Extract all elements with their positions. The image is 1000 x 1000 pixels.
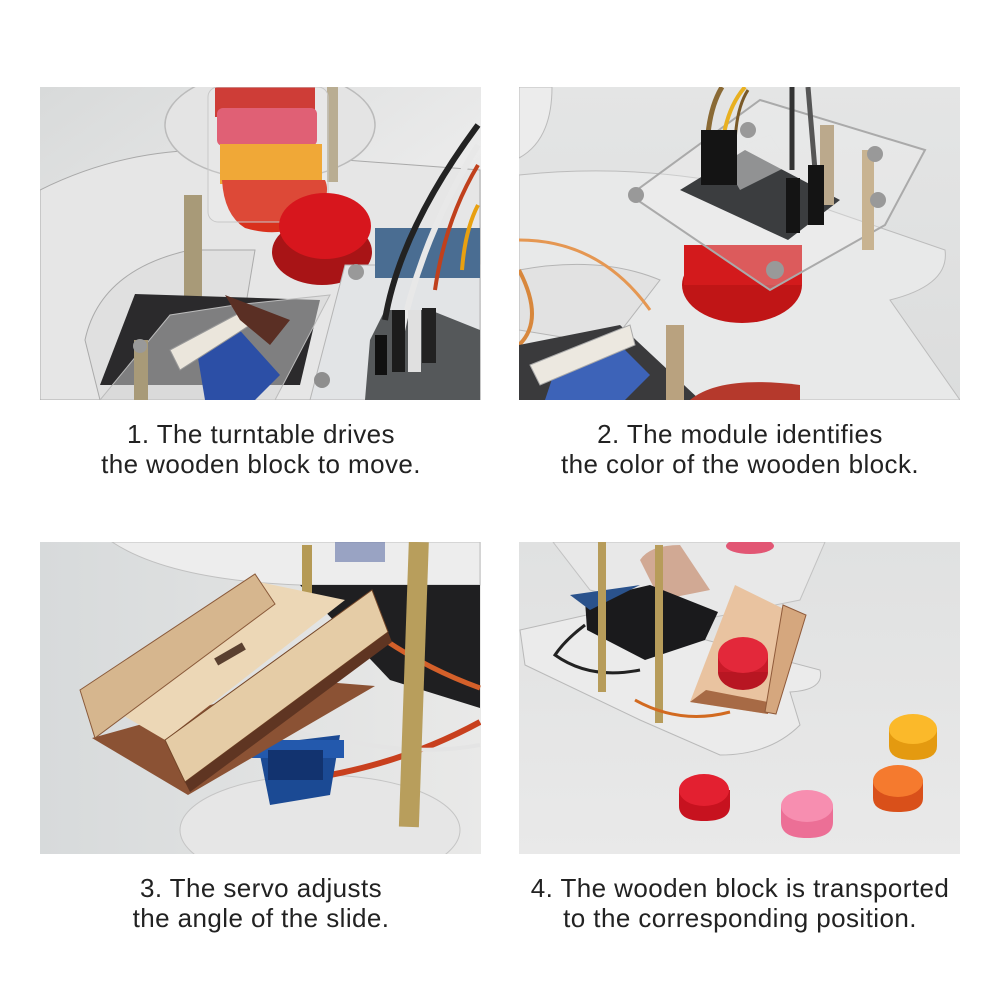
- caption 3: [133, 873, 389, 933]
- red wooden block: [272, 193, 372, 285]
- caption 4: 4. The wooden block is transported: [531, 873, 949, 903]
- jumper wires: [701, 87, 824, 233]
- slide with red block: [690, 585, 806, 714]
- orange yellow block: [889, 714, 937, 760]
- caption 1: 1. The turntable drives: [127, 419, 395, 449]
- caption 2: [561, 419, 919, 479]
- red block: [679, 774, 730, 821]
- acrylic base: [520, 612, 821, 755]
- caption 1: the wooden block to move.: [101, 449, 421, 479]
- blue servo: [252, 735, 344, 805]
- caption 4: to the corresponding position.: [563, 903, 917, 933]
- caption 3: the angle of the slide.: [133, 903, 389, 933]
- wires and sensor board: [310, 125, 480, 400]
- panel 1: turntable photo: [40, 87, 481, 400]
- orange block: [873, 765, 923, 812]
- caption 1: [101, 419, 421, 479]
- wooden slide: [80, 574, 392, 795]
- red tube stack: [208, 87, 328, 232]
- red wooden block: [682, 245, 802, 323]
- caption 3: 3. The servo adjusts: [140, 873, 382, 903]
- panel 3: servo slide photo: [40, 542, 481, 854]
- acrylic sensor mount: [628, 100, 925, 290]
- battery box: [555, 542, 718, 723]
- caption 2: 2. The module identifies: [597, 419, 883, 449]
- black servo board: [100, 294, 320, 385]
- caption 2: the color of the wooden block.: [561, 449, 919, 479]
- servo assembly: [519, 325, 800, 400]
- pink block: [781, 790, 833, 838]
- panel 4: finished sorter photo: [519, 542, 960, 854]
- panel 2: color sensor photo: [519, 87, 960, 400]
- caption 4: [531, 873, 949, 933]
